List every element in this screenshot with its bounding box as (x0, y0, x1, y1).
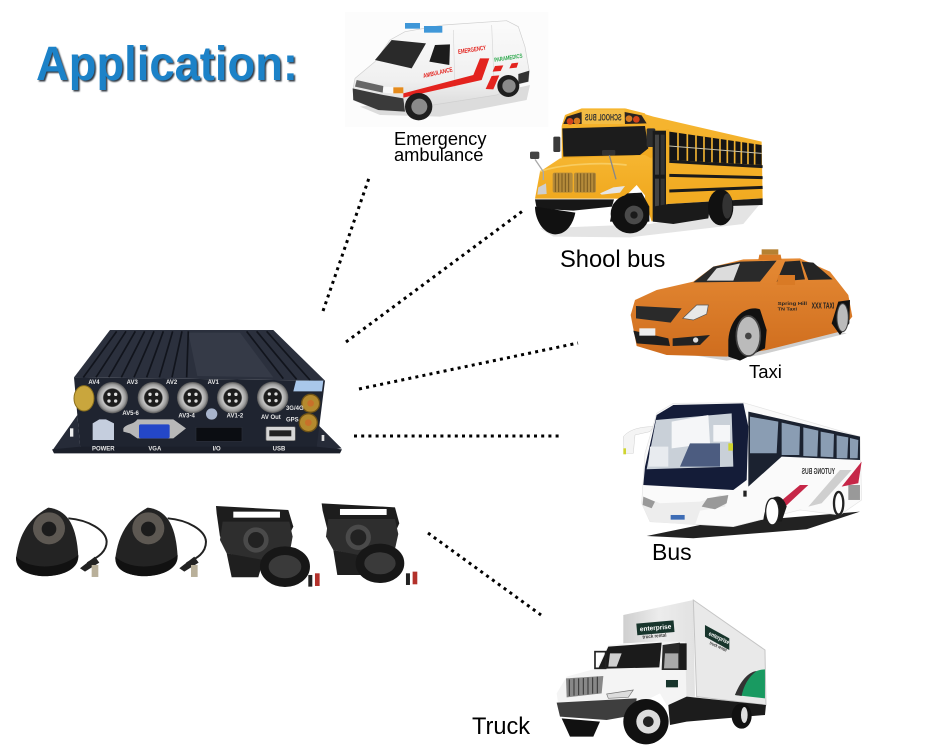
image: school bus (530, 108, 763, 237)
image: truck (557, 600, 766, 744)
image: ambulance: EMERGENCY (458, 45, 487, 56)
image: DVR recorder: AV Out (261, 415, 281, 421)
image: taxi: Spring Hill (778, 301, 808, 307)
image: DVR recorder: GPS (286, 417, 299, 423)
image: DVR recorder: 3G/4G (286, 406, 304, 412)
label: school bus: Shool bus (560, 247, 665, 273)
image: taxi: TN Taxi (778, 307, 798, 313)
image: DVR recorder: AV1 (208, 380, 220, 386)
image: truck: truck rental (642, 633, 667, 641)
image: DVR recorder: AV5-6 (122, 411, 140, 417)
dotted connector: ambulance (323, 178, 369, 311)
image: truck: truck rental (709, 640, 728, 653)
label: taxi: Taxi (749, 361, 782, 382)
image: DVR recorder: VGA (148, 446, 162, 452)
title: Application: (36, 38, 298, 91)
image: rear-view cameras with cables (216, 503, 417, 587)
image: DVR recorder: I/O (213, 446, 221, 452)
image: DVR recorder: USB (273, 446, 286, 452)
label: bus: Bus (652, 539, 692, 565)
image: DVR recorder: AV2 (166, 380, 178, 386)
label: truck: Truck (472, 714, 530, 740)
dotted connector: truck (428, 533, 541, 615)
image: truck: enterprise (707, 631, 730, 646)
title: Application: (38, 40, 300, 92)
image: ambulance: AMBULANCE (423, 66, 453, 80)
image: truck: enterprise (640, 624, 672, 633)
image: DVR recorder (52, 330, 342, 453)
dotted connector: school bus (346, 210, 524, 342)
image: DVR recorder: AV3-4 (178, 414, 196, 420)
image: ambulance (345, 12, 548, 127)
image: school bus: SCHOOL BUS (585, 113, 622, 123)
image: coach bus (623, 403, 862, 538)
image: DVR recorder: POWER (92, 446, 115, 452)
image: DVR recorder: AV3 (127, 380, 139, 386)
image: DVR recorder: AV1-2 (227, 414, 244, 420)
image: taxi (631, 249, 852, 361)
image: ambulance: PARAMEDICS (494, 54, 523, 64)
dotted connector: bus (354, 434, 562, 438)
image: DVR recorder: AV4 (88, 380, 100, 386)
image: dome cameras (16, 508, 206, 577)
image: coach bus: YUTONG BUS (801, 467, 835, 476)
label: emergency ambulance: ambulance (394, 144, 483, 165)
label: emergency ambulance (394, 128, 487, 165)
label: emergency ambulance: Emergency (394, 128, 487, 149)
image: taxi: XXX TAXI (812, 302, 834, 311)
dotted connector: taxi (359, 343, 578, 389)
